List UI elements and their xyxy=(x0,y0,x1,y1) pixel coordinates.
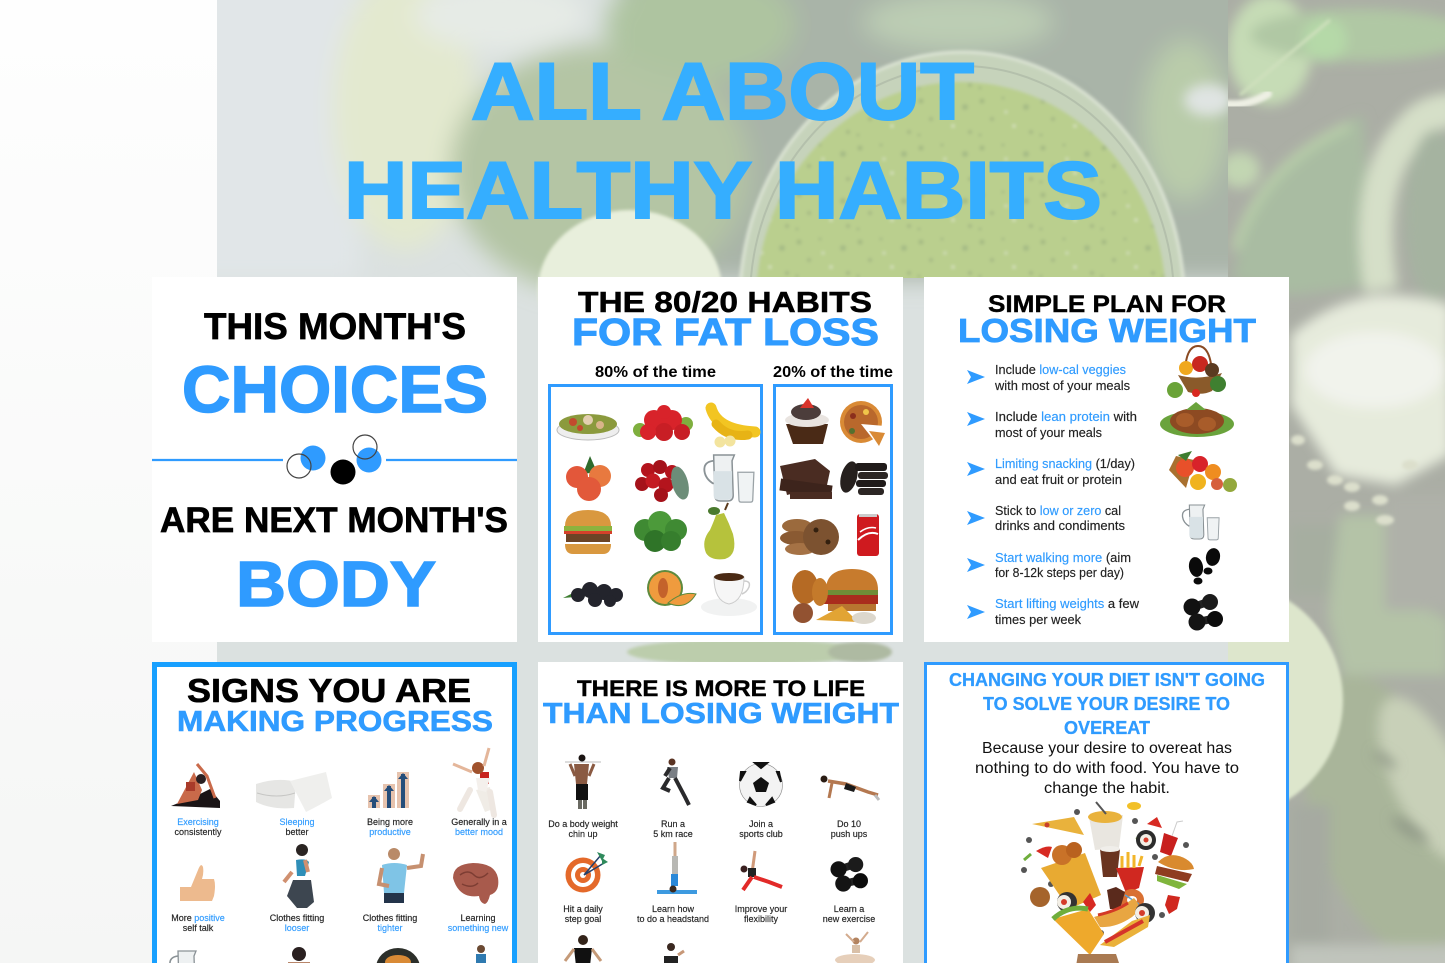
icon: soccer ball xyxy=(740,763,782,806)
captions row 1: better xyxy=(285,827,309,837)
icon: target xyxy=(566,852,608,892)
captions row 1: Generally in a xyxy=(451,817,507,827)
heading: are next month's: ARE NEXT MONTH'S xyxy=(160,501,508,540)
icon: jumping woman xyxy=(453,748,494,815)
icon: chin up xyxy=(565,754,601,809)
panel: this month's choices xyxy=(152,277,517,642)
captions row 1 xyxy=(548,819,868,839)
heading: than losing weight: THAN LOSING WEIGHT xyxy=(543,698,899,730)
icon: pillows xyxy=(256,772,332,812)
icon: headstand xyxy=(657,842,697,894)
body text: change the habit. xyxy=(1044,780,1170,797)
divider with circles xyxy=(152,435,517,484)
icon: lettuce xyxy=(634,511,687,552)
panel: signs you are making progress xyxy=(154,664,514,963)
list text: Include lean protein with xyxy=(995,410,1137,424)
icon: row 3 salad bowl xyxy=(376,948,420,963)
icon: thumbs up xyxy=(180,865,215,901)
captions row 2 xyxy=(171,913,509,933)
icon: water xyxy=(1182,505,1219,540)
list text: times per week xyxy=(995,613,1082,627)
panel: simple plan for losing weight xyxy=(924,277,1289,642)
captions row 2: Learning xyxy=(460,913,496,923)
icon: strawberries xyxy=(633,405,693,441)
icon: water pitcher xyxy=(704,455,754,502)
middle band of the photo xyxy=(180,0,1260,963)
icon: dumbbells xyxy=(830,857,868,892)
icon: jogging woman xyxy=(664,943,684,963)
captions row 2: More positive xyxy=(171,913,225,923)
icon: side stretch xyxy=(740,851,782,890)
title: HEALTHY HABITS xyxy=(344,146,1102,236)
body text: nothing to do with food. You have to xyxy=(975,760,1239,777)
icon: cupcake xyxy=(785,398,829,444)
list text: Limiting snacking (1/day) xyxy=(995,457,1135,471)
right band of the photo xyxy=(1228,0,1445,963)
panel: changing your diet xyxy=(926,664,1288,963)
icon: woman with loose jeans xyxy=(284,844,314,908)
icon: row 3 pitcher xyxy=(170,951,213,963)
icon: cola can xyxy=(857,514,879,556)
icon: veggie basket xyxy=(1167,346,1226,398)
icon: cookies xyxy=(780,519,839,555)
heading: changing your diet xyxy=(949,670,1265,738)
captions row 2: Learn a xyxy=(834,904,864,914)
heading: the 80/20 habits: THE 80/20 HABITS xyxy=(578,287,872,319)
heading: signs you are: SIGNS YOU ARE xyxy=(187,672,471,709)
captions row 1: better mood xyxy=(455,827,503,837)
captions row 2: Clothes fitting xyxy=(270,913,324,923)
captions row 1: chin up xyxy=(568,829,598,839)
captions row 1: Join a xyxy=(749,819,773,829)
icon: pizza xyxy=(840,401,885,446)
icon: coffee xyxy=(701,573,757,616)
captions row 1 xyxy=(174,817,507,837)
label: 80%: 80% of the time xyxy=(595,364,716,381)
box: 20 percent foods xyxy=(774,386,892,634)
captions row 2 xyxy=(563,904,875,924)
heading: losing weight: LOSING WEIGHT xyxy=(958,312,1256,349)
heading: choices: CHOICES xyxy=(182,352,488,426)
title: ALL ABOUT xyxy=(471,47,974,137)
icon: chocolate xyxy=(779,459,833,499)
captions row 2: new exercise xyxy=(823,914,875,924)
captions row 2: step goal xyxy=(565,914,601,924)
heading: making progress: MAKING PROGRESS xyxy=(177,706,493,738)
icon: oreos xyxy=(837,459,888,495)
icon: burger xyxy=(564,510,612,554)
icon: lean protein xyxy=(1160,402,1234,437)
icon: jump rope xyxy=(565,935,601,963)
icon: brain xyxy=(453,863,498,904)
heading: this month's: THIS MONTH'S xyxy=(204,306,466,347)
captions row 1: Run a xyxy=(661,819,685,829)
icon: growth chart xyxy=(368,772,409,808)
icon: cherries xyxy=(635,460,692,502)
captions row 1: Sleeping xyxy=(279,817,315,827)
captions row 1: Exercising xyxy=(177,817,219,827)
body text: Because your desire to overeat has xyxy=(982,740,1232,757)
list text: most of your meals xyxy=(995,426,1102,440)
panel: more to life than losing weight xyxy=(538,662,903,963)
captions row 2: something new xyxy=(448,923,509,933)
heading: changing your diet: OVEREAT xyxy=(1064,718,1150,738)
icon: yoga xyxy=(171,764,220,808)
captions row 2: flexibility xyxy=(744,914,779,924)
glass of green smoothie xyxy=(738,49,1186,278)
captions row 1: Being more xyxy=(367,817,413,827)
list text: Include low-cal veggies xyxy=(995,363,1126,377)
icon: salad xyxy=(557,414,619,440)
icon: row 3 athlete xyxy=(476,945,486,963)
icon: push up xyxy=(820,776,879,800)
heading: for fat loss: FOR FAT LOSS xyxy=(572,312,879,354)
title xyxy=(344,47,1102,236)
icon: peaches xyxy=(566,456,611,501)
icon: banana xyxy=(711,408,755,447)
captions row 2: to do a headstand xyxy=(637,914,709,924)
list text: and eat fruit or protein xyxy=(995,473,1122,487)
list text: for 8-12k steps per day) xyxy=(995,566,1124,580)
icon: dumbbell xyxy=(1184,594,1223,630)
captions row 1: 5 km race xyxy=(653,829,693,839)
label: 20%: 20% of the time xyxy=(773,364,893,381)
captions row 2: Learn how xyxy=(652,904,695,914)
heading: changing your diet: CHANGING YOUR DIET ISN'T GOING xyxy=(949,670,1265,690)
captions row 2: tighter xyxy=(377,923,403,933)
captions row 2: self talk xyxy=(183,923,214,933)
captions row 1: Do a body weight xyxy=(548,819,618,829)
icon: fruit xyxy=(1169,451,1237,492)
captions row 2: looser xyxy=(285,923,309,933)
icon: flexing man xyxy=(379,848,423,903)
icon: runner xyxy=(663,758,689,805)
list text: Start walking more (aim xyxy=(995,551,1131,565)
icon: row 3 woman xyxy=(288,947,310,963)
heading: body: BODY xyxy=(236,548,436,620)
icon: fast food combo xyxy=(792,569,878,624)
icon: pear xyxy=(704,503,734,559)
captions row 1: sports club xyxy=(739,829,783,839)
illustration: fast food heart xyxy=(1021,802,1194,963)
icon: footprints xyxy=(1187,547,1222,584)
box: 80 percent foods xyxy=(550,386,762,634)
heading: changing your diet: TO SOLVE YOUR DESIRE TO xyxy=(983,694,1230,714)
captions row 2: Improve your xyxy=(735,904,787,914)
arrows xyxy=(967,370,985,619)
panel: 80/20 habits xyxy=(538,277,903,642)
list text: Stick to low or zero cal xyxy=(995,504,1121,518)
captions row 1: consistently xyxy=(174,827,222,837)
list text: Start lifting weights a few xyxy=(995,597,1140,611)
icon: melon xyxy=(647,570,696,606)
list text: drinks and condiments xyxy=(995,519,1125,533)
icon: blackberries xyxy=(563,582,623,607)
captions row 2: Clothes fitting xyxy=(363,913,417,923)
list text xyxy=(994,363,1140,627)
heading: simple plan for: SIMPLE PLAN FOR xyxy=(988,291,1226,318)
body text xyxy=(975,740,1239,797)
icon: ballet dancer xyxy=(835,932,875,963)
heading: there is more to life: THERE IS MORE TO LIFE xyxy=(577,676,865,701)
captions row 1: push ups xyxy=(831,829,868,839)
captions row 2: Hit a daily xyxy=(563,904,603,914)
captions row 1: Do 10 xyxy=(837,819,861,829)
captions row 1: productive xyxy=(369,827,411,837)
list text: with most of your meals xyxy=(994,379,1130,393)
